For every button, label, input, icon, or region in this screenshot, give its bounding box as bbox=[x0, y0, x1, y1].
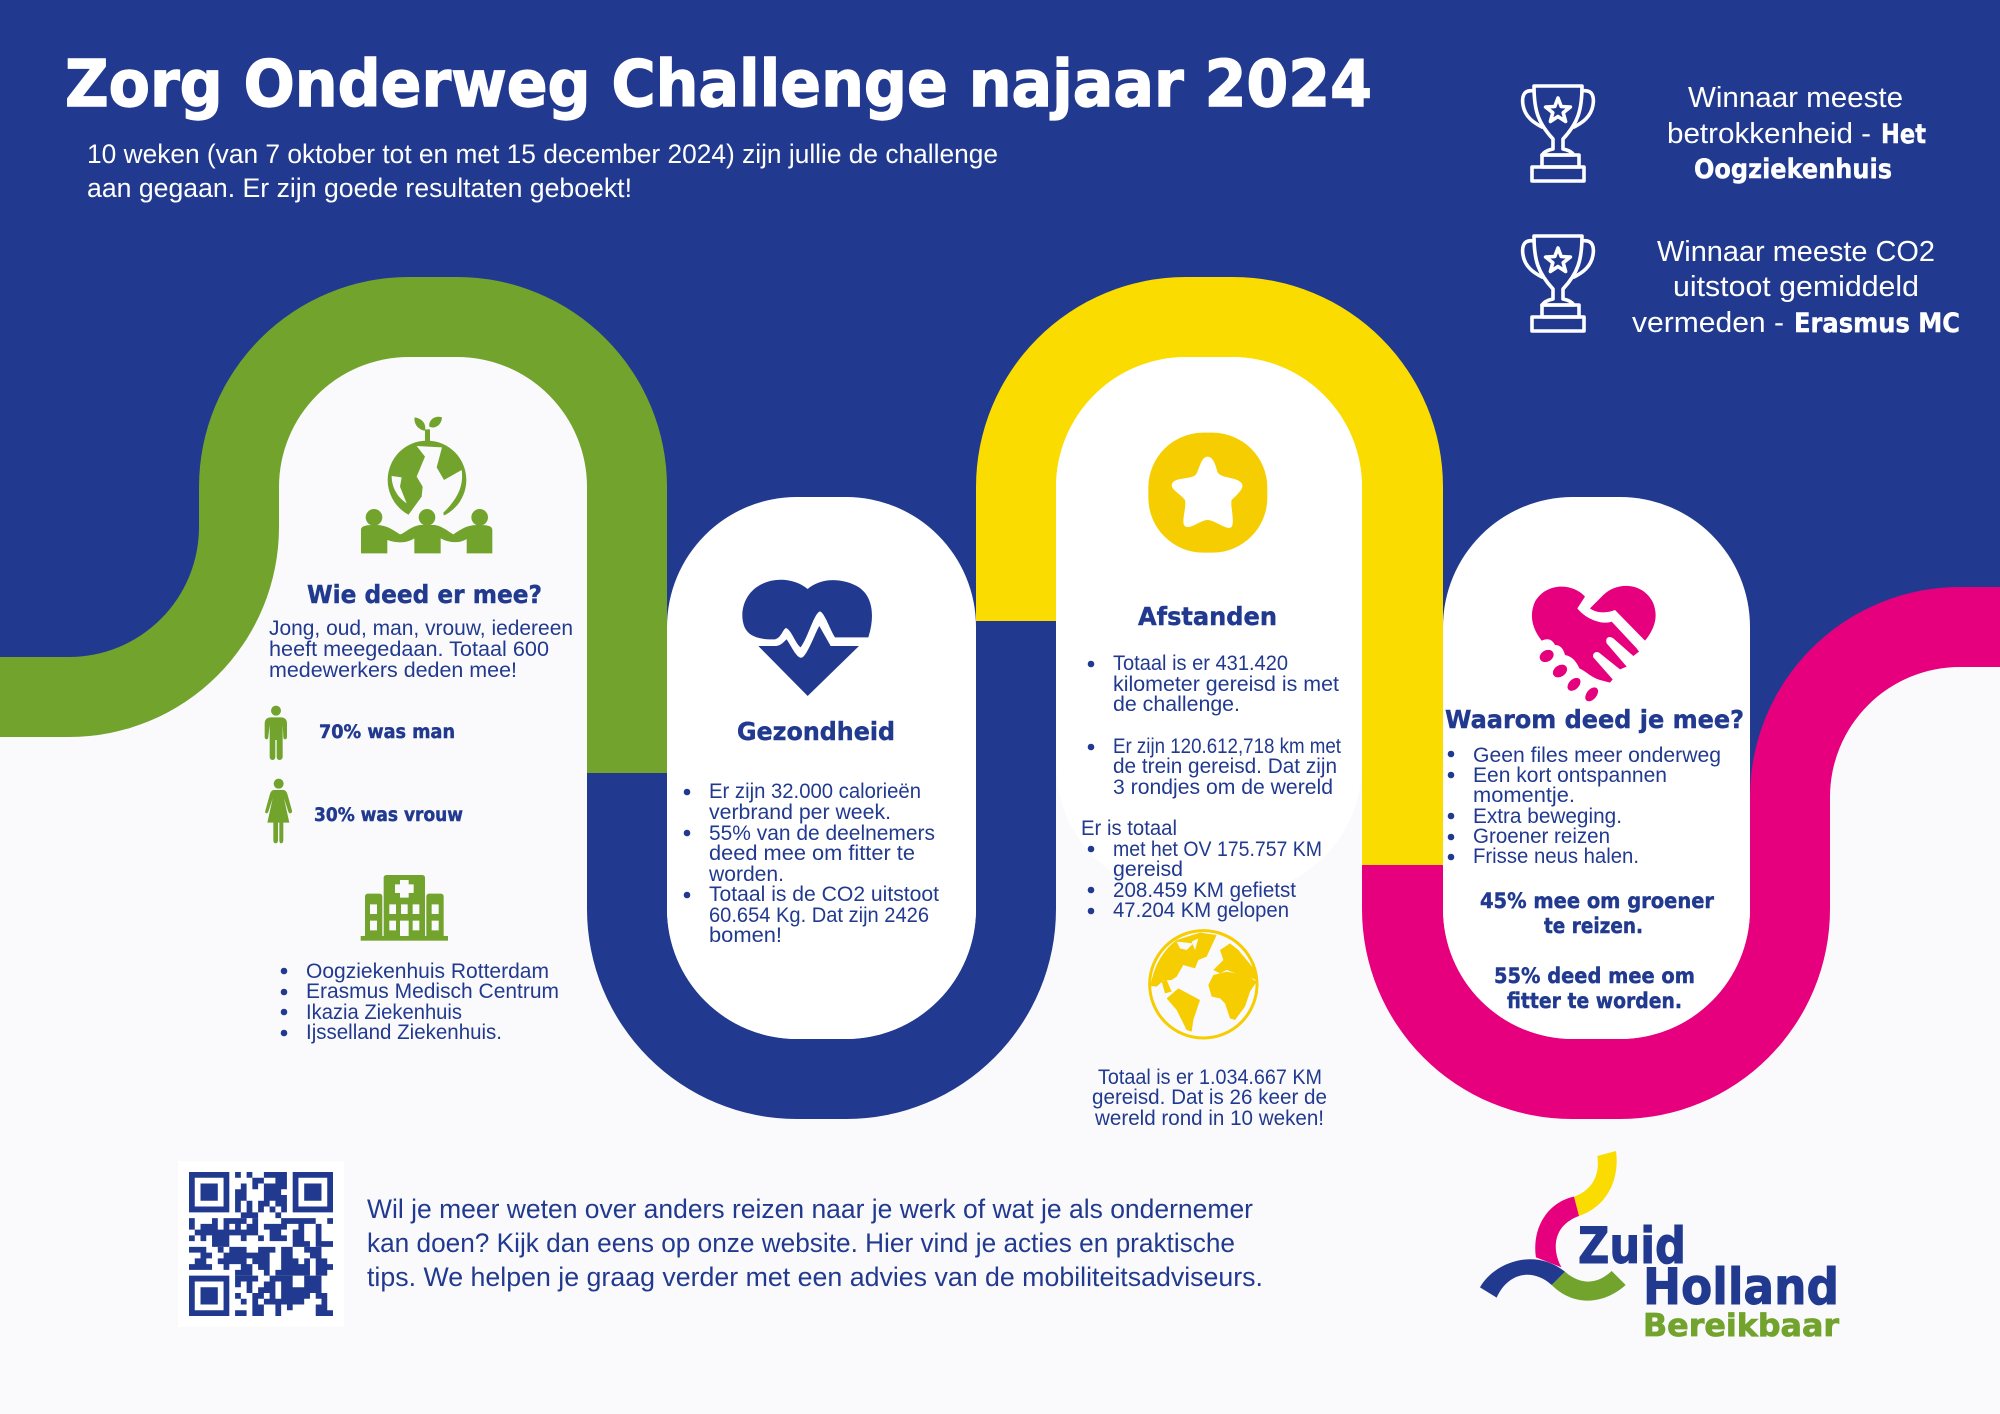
reasons list: Frisse neus halen. bbox=[1473, 844, 1639, 868]
distance list: Er zijn 120.612,718 km met bbox=[1113, 734, 1341, 758]
panel: Afstanden bbox=[1081, 433, 1341, 1130]
health list: deed mee om fitter te bbox=[709, 841, 915, 865]
distance list: met het OV 175.757 KM bbox=[1113, 837, 1322, 861]
white pill: Gezondheid bbox=[667, 497, 976, 1039]
icon: man bbox=[265, 706, 287, 760]
panel: Waarom deed je mee bbox=[1445, 586, 1744, 1014]
reasons list bbox=[1448, 743, 1721, 868]
distance list: 208.459 KM gefietst bbox=[1113, 878, 1296, 902]
winner text 2: Erasmus MC bbox=[1794, 308, 1960, 339]
text block: medewerkers deden mee! bbox=[269, 658, 517, 682]
logo mark bbox=[1480, 1151, 1626, 1301]
health list: 60.654 Kg. Dat zijn 2426 bbox=[709, 903, 929, 927]
distance list: kilometer gereisd is met bbox=[1113, 672, 1339, 696]
heading: Waarom deed je mee? bbox=[1445, 705, 1744, 734]
logo wordmark: Zuid bbox=[1578, 1217, 1686, 1275]
panel: Gezondheid bbox=[684, 580, 939, 947]
heading: Gezondheid bbox=[737, 717, 895, 746]
road segment: navy bbox=[587, 621, 1056, 1119]
total distance text bbox=[1092, 1065, 1327, 1130]
stat: fitter: fitter te worden. bbox=[1507, 989, 1682, 1014]
icon: woman bbox=[265, 779, 292, 843]
QR code bbox=[178, 1161, 344, 1327]
road segment: pink bbox=[1362, 587, 2000, 1119]
road: winding coloured route bbox=[0, 277, 2000, 1119]
icon: hospital bbox=[361, 875, 448, 941]
distance list: gereisd bbox=[1113, 857, 1183, 881]
road segment: yellow bbox=[976, 277, 1443, 865]
footer text: tips. We helpen je graag verder met een advies van de mobiliteitsadviseurs. bbox=[367, 1262, 1263, 1292]
reasons list: Groener reizen bbox=[1473, 824, 1610, 848]
icon: world globe bbox=[1150, 931, 1257, 1038]
title: Zorg Onderweg Challenge najaar 2024 bbox=[65, 48, 1372, 122]
road segment: green bbox=[0, 277, 667, 773]
hospital list: Erasmus Medisch Centrum bbox=[306, 979, 559, 1003]
winner text 1 bbox=[1667, 82, 1926, 185]
white pill: Waarom bbox=[1443, 497, 1750, 1039]
winner text 1: Winnaar meeste bbox=[1688, 82, 1903, 114]
winner text 2: uitstoot gemiddeld bbox=[1673, 271, 1919, 303]
stat: fitter bbox=[1494, 964, 1695, 1014]
stat: woman: 30% was vrouw bbox=[314, 805, 463, 826]
navy upper background bbox=[0, 0, 2000, 885]
text block: heeft meegedaan. Totaal 600 bbox=[269, 637, 549, 661]
winner text 1: Het bbox=[1881, 119, 1926, 150]
panel: Wie deed er mee bbox=[265, 417, 573, 1044]
intro text bbox=[87, 139, 998, 203]
hospital list: Ikazia Ziekenhuis bbox=[306, 1000, 462, 1024]
health list: verbrand per week. bbox=[709, 800, 891, 824]
distance list: 3 rondjes om de wereld bbox=[1113, 775, 1333, 799]
health list: worden. bbox=[708, 862, 784, 886]
icon: trophy 1 bbox=[1523, 86, 1593, 181]
text block bbox=[269, 616, 573, 682]
winner text 2: Winnaar meeste CO2 bbox=[1657, 236, 1935, 268]
reasons list: Extra beweging. bbox=[1473, 804, 1622, 828]
icon: globe with people bbox=[361, 417, 492, 553]
logo: Zuid Holland Bereikbaar bbox=[1480, 1151, 1840, 1344]
stat: fitter: 55% deed mee om bbox=[1494, 964, 1695, 989]
winner text 2 bbox=[1632, 236, 1960, 339]
heading: Afstanden bbox=[1138, 602, 1277, 631]
hospital list: Ijsselland Ziekenhuis. bbox=[306, 1020, 502, 1044]
health list: Totaal is de CO2 uitstoot bbox=[709, 882, 939, 906]
stat: greener travel bbox=[1480, 889, 1714, 939]
logo: Zuid Holland Bereikbaar: Bereikbaar bbox=[1643, 1308, 1840, 1344]
total distance text: Totaal is er 1.034.667 KM bbox=[1098, 1065, 1322, 1089]
icon: star badge bbox=[1148, 433, 1267, 553]
intro text: aan gegaan. Er zijn goede resultaten geboekt! bbox=[87, 173, 632, 203]
distance list: de challenge. bbox=[1113, 692, 1240, 716]
distance list bbox=[1081, 651, 1341, 922]
winner text 1: Oogziekenhuis bbox=[1694, 154, 1892, 185]
winner text 2: vermeden - bbox=[1632, 307, 1784, 339]
total distance text: gereisd. Dat is 26 keer de bbox=[1092, 1085, 1327, 1109]
health list: bomen! bbox=[709, 923, 782, 947]
intro text: 10 weken (van 7 oktober tot en met 15 december 2024) zijn jullie de challenge bbox=[87, 139, 998, 169]
text block: Jong, oud, man, vrouw, iedereen bbox=[269, 616, 573, 640]
hospital list: Oogziekenhuis Rotterdam bbox=[306, 959, 549, 983]
stat: greener travel: te reizen. bbox=[1544, 914, 1643, 939]
heading: Wie deed er mee? bbox=[307, 580, 542, 609]
health list bbox=[684, 779, 939, 947]
white pill: Afstanden bbox=[1056, 357, 1362, 895]
distance list: Totaal is er 431.420 bbox=[1113, 651, 1288, 675]
distance list: 47.204 KM gelopen bbox=[1113, 898, 1289, 922]
footer text bbox=[367, 1194, 1263, 1292]
icon: handshake heart bbox=[1532, 586, 1656, 704]
reasons list: Een kort ontspannen bbox=[1473, 763, 1667, 787]
health list: Er zijn 32.000 calorieën bbox=[709, 779, 921, 803]
hospital list bbox=[281, 959, 559, 1044]
distance list: de trein gereisd. Dat zijn bbox=[1113, 754, 1337, 778]
logo: Zuid Holland Bereikbaar: Holland bbox=[1643, 1258, 1839, 1316]
reasons list: momentje. bbox=[1473, 783, 1575, 807]
total distance text: wereld rond in 10 weken! bbox=[1094, 1106, 1324, 1130]
winner text 1: betrokkenheid - bbox=[1667, 118, 1871, 150]
stat: man: 70% was man bbox=[319, 722, 455, 743]
footer text: kan doen? Kijk dan eens op onze website. Hier vind je acties en praktische bbox=[367, 1228, 1235, 1258]
footer text: Wil je meer weten over anders reizen naar je werk of wat je als ondernemer bbox=[367, 1194, 1253, 1224]
icon: trophy 2 bbox=[1523, 236, 1593, 331]
stat: greener travel: 45% mee om groener bbox=[1480, 889, 1714, 914]
distance list: Er is totaal bbox=[1081, 816, 1177, 840]
health list: 55% van de deelnemers bbox=[709, 821, 935, 845]
icon: heart with pulse bbox=[742, 580, 872, 696]
reasons list: Geen files meer onderweg bbox=[1473, 743, 1721, 767]
